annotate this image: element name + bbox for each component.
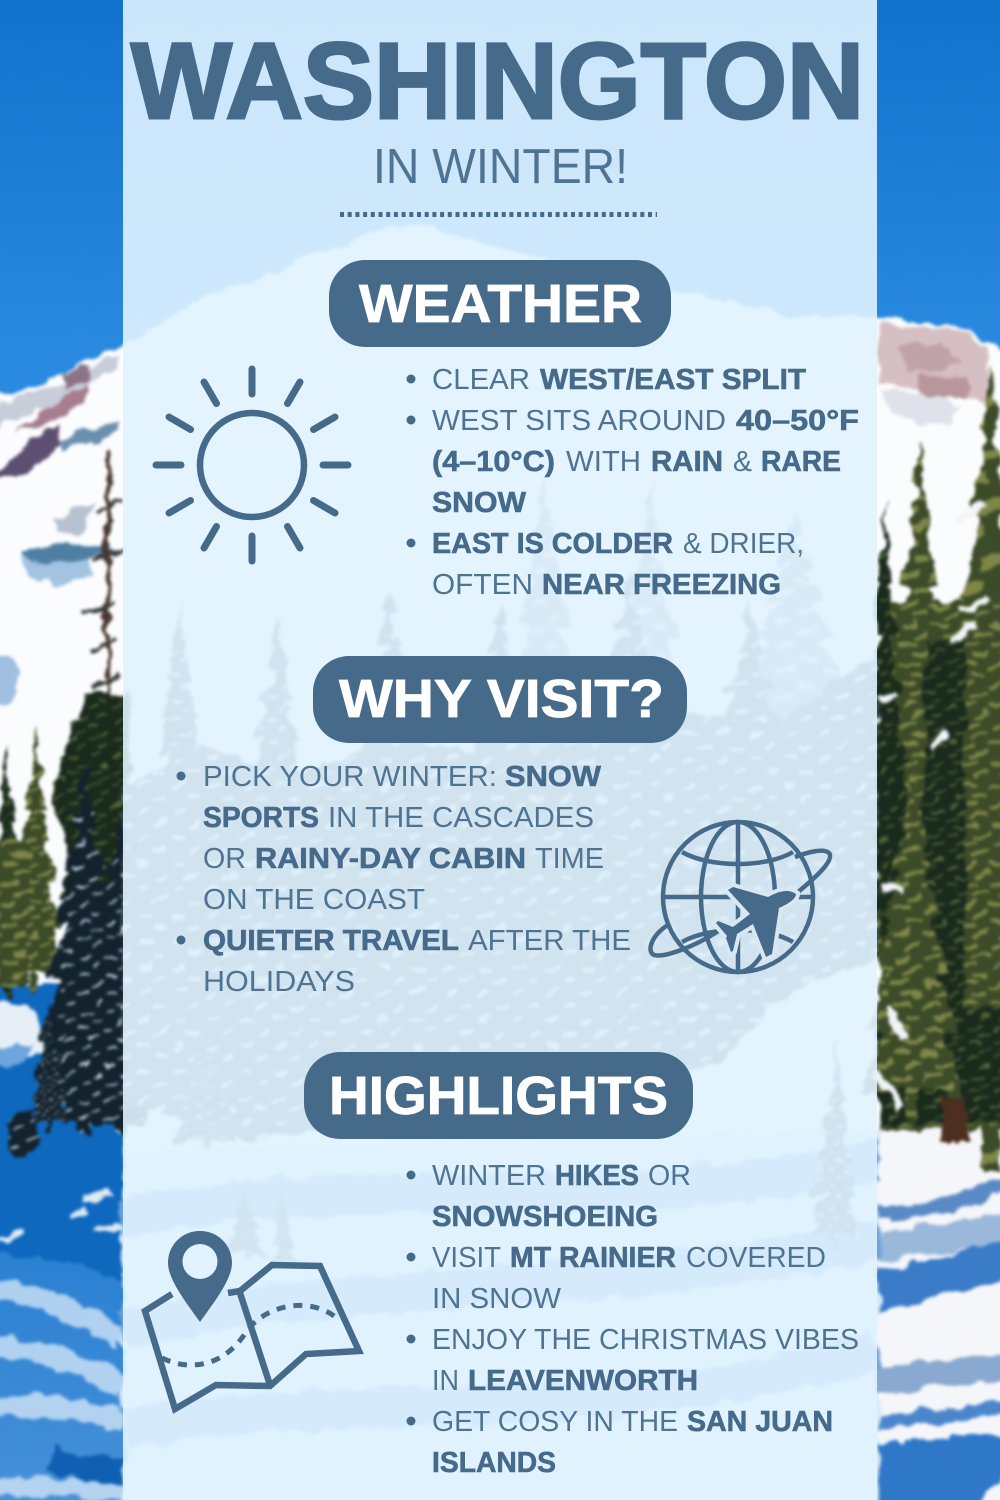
highlights bullet list: GET COSY IN THE bbox=[432, 1406, 678, 1438]
highlights bullet list: SNOWSHOEING bbox=[432, 1201, 658, 1233]
why visit bullet list: ON THE COAST bbox=[203, 884, 425, 916]
weather bullet list: SNOW bbox=[432, 487, 527, 519]
highlights bullet list: IN SNOW bbox=[432, 1283, 562, 1315]
weather heading pill: WEATHER bbox=[359, 274, 642, 334]
why visit bullet list: SNOW bbox=[505, 761, 602, 793]
highlights bullet list: COVERED bbox=[686, 1242, 826, 1274]
why visit bullet list: SPORTS bbox=[203, 802, 319, 834]
weather bullet list: & DRIER, bbox=[683, 528, 804, 560]
weather bullet list: EAST IS COLDER bbox=[432, 528, 673, 560]
section: weather bbox=[156, 260, 859, 601]
weather bullet list: WITH bbox=[566, 446, 641, 478]
trees and snow behind the panel bbox=[123, 1130, 877, 1500]
weather bullet list: & bbox=[733, 446, 752, 478]
lower left snow bbox=[0, 985, 123, 1280]
subtitle: IN WINTER! bbox=[373, 140, 628, 194]
weather bullet list: RAIN bbox=[651, 446, 723, 478]
why visit heading pill bbox=[313, 656, 687, 743]
why visit bullet list: HOLIDAYS bbox=[203, 966, 355, 998]
weather bullet list: RARE bbox=[761, 446, 841, 478]
translucent content panel bbox=[123, 0, 877, 1500]
weather bullet list: (4–10°C) bbox=[432, 446, 555, 478]
highlights bullet list: LEAVENWORTH bbox=[468, 1365, 698, 1397]
weather bullet list: NEAR FREEZING bbox=[542, 569, 781, 601]
highlights bullet list bbox=[406, 1160, 859, 1479]
weather bullet list: OFTEN bbox=[432, 569, 533, 601]
highlights bullet list: IN bbox=[432, 1365, 459, 1397]
icon: sun bbox=[156, 369, 348, 561]
weather bullet list bbox=[406, 364, 859, 601]
highlights bullet list: ENJOY THE CHRISTMAS VIBES bbox=[432, 1324, 859, 1356]
why visit bullet list: IN THE CASCADES bbox=[328, 802, 594, 834]
why visit bullet list: OR bbox=[203, 843, 246, 875]
why visit bullet list: PICK YOUR WINTER: bbox=[203, 761, 497, 793]
weather bullet list: 40–50°F bbox=[736, 405, 859, 437]
why visit heading pill: WHY VISIT? bbox=[339, 669, 664, 729]
highlights bullet list: SAN JUAN bbox=[687, 1406, 833, 1438]
highlights bullet list: ISLANDS bbox=[432, 1447, 556, 1479]
highlights bullet list: WINTER bbox=[432, 1160, 546, 1192]
highlights bullet list: OR bbox=[648, 1160, 691, 1192]
highlights bullet list: VISIT bbox=[432, 1242, 501, 1274]
weather bullet list: WEST/EAST SPLIT bbox=[540, 364, 806, 396]
section: highlights bbox=[145, 1052, 859, 1479]
right column bbox=[877, 1125, 1000, 1500]
highlights heading pill bbox=[304, 1052, 693, 1139]
highlights bullet list: HIKES bbox=[555, 1160, 639, 1192]
highlights heading pill: HIGHLIGHTS bbox=[329, 1066, 668, 1126]
why visit bullet list: RAINY-DAY CABIN bbox=[255, 843, 526, 875]
highlights bullet list: MT RAINIER bbox=[510, 1242, 676, 1274]
why visit bullet list: AFTER THE bbox=[468, 925, 631, 957]
icon: globe with plane bbox=[650, 822, 830, 972]
left trees bbox=[0, 745, 32, 1000]
why visit bullet list: TIME bbox=[535, 843, 604, 875]
weather bullet list: CLEAR bbox=[432, 364, 530, 396]
why visit bullet list: QUIETER TRAVEL bbox=[203, 925, 459, 957]
section: why visit bbox=[176, 656, 830, 998]
icon: map with location pin bbox=[145, 1231, 359, 1409]
weather heading pill bbox=[329, 260, 671, 347]
why visit bullet list bbox=[176, 761, 631, 998]
title: WASHINGTON bbox=[131, 20, 864, 141]
weather bullet list: WEST SITS AROUND bbox=[432, 405, 726, 437]
